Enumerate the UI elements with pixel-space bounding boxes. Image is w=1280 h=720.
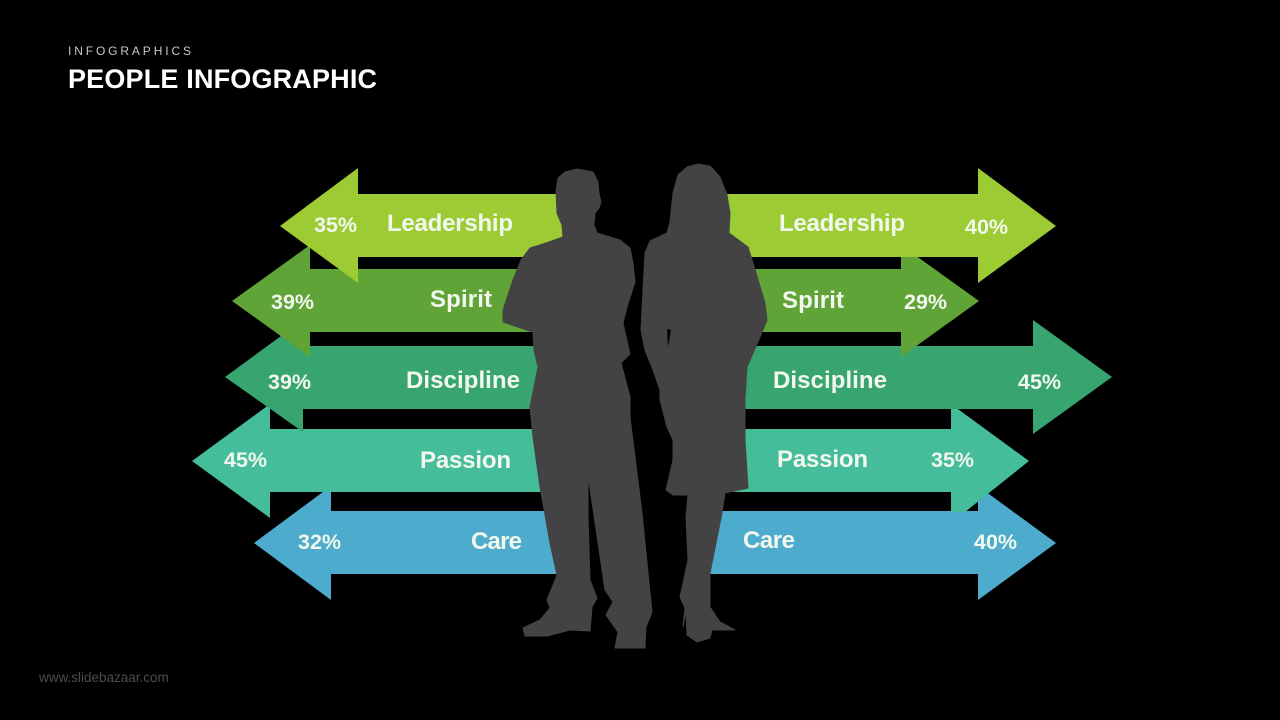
right arrow: leadership 40%	[700, 168, 1056, 283]
right arrow: leadership 40%: 40%	[965, 215, 1008, 239]
right arrow: spirit 29%: 29%	[904, 290, 947, 314]
right arrow: care 40%: Care	[743, 527, 795, 554]
right arrow: care 40%	[700, 486, 1056, 600]
left arrow: passion 45%: Passion	[420, 447, 511, 474]
left arrow: passion 45%: 45%	[224, 448, 267, 472]
right arrow: passion 35%: 35%	[931, 448, 974, 472]
left arrow: passion 45%	[192, 404, 560, 518]
right arrow: spirit 29%: Spirit	[782, 287, 844, 314]
right arrow: discipline 45%	[710, 320, 1112, 434]
eyebrow heading: INFOGRAPHICS	[68, 44, 191, 58]
left arrow: care 32%	[254, 486, 570, 600]
left arrow: spirit 39%: 39%	[271, 290, 314, 314]
right arrow: discipline 45%: Discipline	[773, 367, 887, 394]
footer watermark: www.slidebazaar.com	[39, 670, 169, 685]
silhouette: woman	[641, 164, 767, 642]
right arrow: spirit 29%	[710, 245, 979, 357]
left arrow: spirit 39%: Spirit	[430, 286, 492, 313]
left arrow: leadership 35%: Leadership	[387, 210, 513, 237]
right arrow: passion 35%: Passion	[777, 446, 868, 473]
right arrow: passion 35%	[710, 404, 1029, 512]
left arrow: leadership 35%: 35%	[314, 213, 357, 237]
left arrow: leadership 35%	[280, 168, 575, 283]
left arrow: spirit 39%	[232, 245, 575, 357]
right arrow: care 40%: 40%	[974, 530, 1017, 554]
silhouette gap: woman's arm	[667, 329, 671, 347]
left arrow: discipline 39%	[225, 320, 570, 432]
left arrow: discipline 39%: 39%	[268, 370, 311, 394]
silhouette: man	[503, 169, 652, 648]
right arrow: discipline 45%: 45%	[1018, 370, 1061, 394]
left arrow: care 32%: Care	[471, 528, 522, 555]
right arrow: leadership 40%: Leadership	[779, 210, 905, 237]
left arrow: discipline 39%: Discipline	[406, 367, 520, 394]
left arrow: care 32%: 32%	[298, 530, 341, 554]
title: PEOPLE INFOGRAPHIC	[68, 64, 377, 94]
